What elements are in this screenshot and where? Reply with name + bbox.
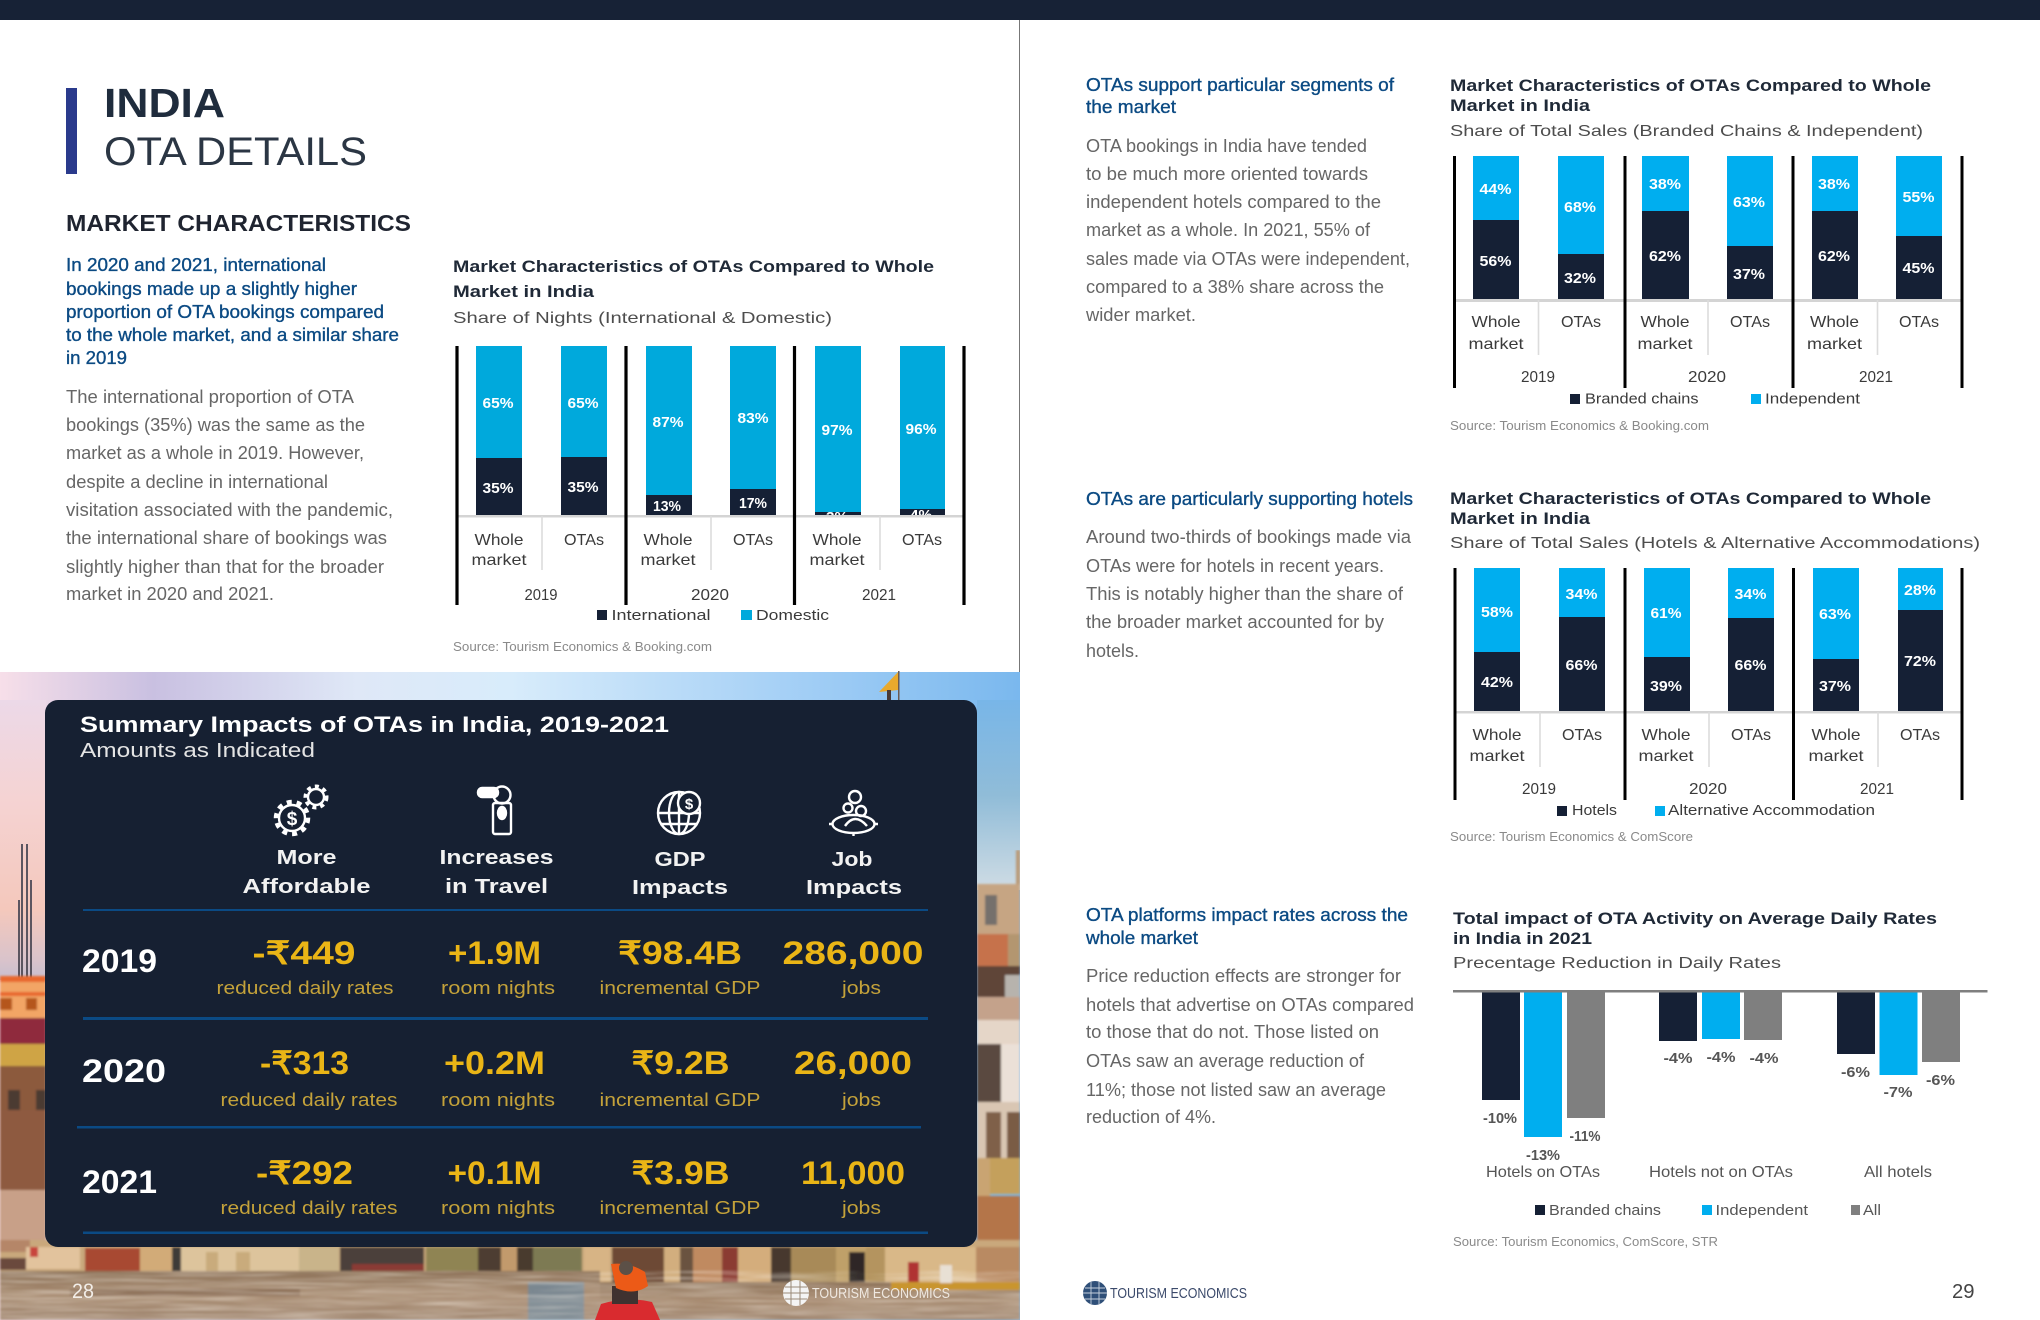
icon: globe with dollar coin — [658, 792, 700, 834]
axis: OTAs — [902, 532, 942, 549]
logo right: Tourism Economics — [1083, 1281, 1247, 1305]
column headers — [242, 847, 902, 899]
legend — [1557, 802, 1875, 819]
stacked bars: 61% — [1650, 606, 1682, 622]
axis: OTAs — [1561, 314, 1601, 331]
text block: hotels: This is notably higher than the share of — [1086, 583, 1404, 604]
category labels: Hotels on OTAs — [1486, 1164, 1600, 1181]
row 2020 — [82, 1045, 912, 1110]
water — [0, 1271, 1020, 1320]
text block: segments: compared to a 38% share across the — [1086, 276, 1384, 297]
text block: rates: OTAs saw an average reduction of — [1086, 1050, 1365, 1071]
row 2019: reduced daily rates — [216, 978, 394, 998]
legend: Hotels — [1572, 802, 1617, 819]
stacked bars — [1474, 568, 1943, 711]
stacked bars: 63% — [1819, 607, 1851, 623]
stacked bars: 34% — [1734, 587, 1767, 603]
row 2019: room nights — [441, 978, 555, 998]
page number 29: 29 — [1952, 1281, 1974, 1303]
text block: market characteristics intro: In 2020 and 2021, international — [66, 255, 326, 275]
chart: branded vs independent — [1450, 76, 1962, 433]
axis: market — [1470, 748, 1525, 765]
row 2020: incremental GDP — [600, 1090, 760, 1110]
row 2021: 11,000 — [801, 1155, 905, 1191]
source: Source: Tourism Economics & ComScore — [1450, 830, 1693, 844]
text block: rates: 11%; those not listed saw an average — [1086, 1079, 1386, 1100]
row 2021: room nights — [441, 1198, 555, 1218]
text block: market characteristics body: the international share of bookings was — [66, 527, 387, 548]
legend — [1570, 390, 1861, 408]
axis: 2020 — [1689, 781, 1727, 798]
stacked bars: 28% — [1904, 583, 1936, 599]
stacked bars: 97% — [822, 423, 853, 439]
chart title — [1450, 489, 1980, 552]
text block: market characteristics body: market in 2020 and 2021. — [66, 583, 274, 604]
text block: rates: OTA platforms impact rates across the — [1086, 905, 1408, 925]
legend: Branded chains — [1549, 1202, 1661, 1219]
axis: 2021 — [862, 587, 896, 604]
axis: OTAs — [1730, 314, 1770, 331]
stacked bars: 37% — [1733, 267, 1765, 283]
row 2019: 286,000 — [782, 935, 924, 971]
axis: 2021 — [1860, 781, 1894, 798]
axis: OTAs — [733, 532, 773, 549]
stacked bars: 35% — [568, 480, 599, 496]
chart title: in India in 2021 — [1453, 929, 1592, 948]
row 2019: ₹98.4B — [618, 935, 742, 971]
chart title: Market Characteristics of OTAs Compared to Whole — [1450, 76, 1931, 95]
axis: Whole — [644, 532, 693, 549]
row 2019: 2019 — [82, 943, 157, 979]
text block: rates: reduction of 4%. — [1086, 1106, 1216, 1127]
column headers: More — [276, 847, 336, 869]
stacked bars — [1473, 156, 1942, 299]
text block: market characteristics intro: to the whole market, and a similar share — [66, 325, 399, 345]
axis: Whole — [1472, 727, 1522, 744]
icon: group of people — [829, 791, 878, 836]
grouped bars — [1453, 990, 1988, 1137]
stacked bars: 42% — [1481, 675, 1513, 691]
legend — [597, 607, 830, 624]
text block: market characteristics body: despite a decline in international — [66, 471, 328, 492]
row 2020: jobs — [841, 1090, 881, 1110]
chart title: Market in India — [1450, 96, 1591, 115]
text block: market characteristics body: bookings (35%) was the same as the — [66, 414, 365, 435]
stacked bars: 38% — [1818, 177, 1850, 193]
chart title — [453, 257, 934, 327]
panel: summary impacts — [45, 700, 977, 1247]
bar value labels: -11% — [1570, 1128, 1600, 1145]
chart title: Market in India — [453, 282, 595, 301]
legend — [1535, 1202, 1881, 1219]
axis: market — [810, 552, 865, 569]
row 2020: +0.2M — [444, 1045, 545, 1081]
row 2021: +0.1M — [448, 1155, 542, 1191]
text block: hotels: hotels. — [1086, 640, 1139, 661]
figure in red robe — [595, 1261, 660, 1320]
axis: 2020 — [1688, 369, 1726, 386]
bar value labels: -4% — [1706, 1049, 1736, 1066]
text block: segments: the market — [1086, 97, 1176, 117]
chart: impact on average daily rates — [1453, 909, 1988, 1249]
text block: market characteristics intro: in 2019 — [66, 348, 127, 368]
stacked bars: 66% — [1566, 658, 1598, 674]
bar value labels: -6% — [1926, 1072, 1955, 1089]
chart title — [1450, 76, 1931, 140]
icon: gears with dollar: $ — [287, 809, 298, 830]
axis: OTAs — [564, 532, 604, 549]
stacked bars: 13% — [653, 499, 681, 515]
row 2020: reduced daily rates — [220, 1090, 398, 1110]
stacked bars: 32% — [1564, 271, 1596, 287]
column headers: Affordable — [242, 876, 370, 898]
column headers: Increases — [440, 847, 554, 869]
stacked bars: 55% — [1902, 190, 1935, 206]
stacked bars: 45% — [1902, 261, 1935, 277]
row 2020: 26,000 — [794, 1045, 912, 1081]
axis: 2019 — [1522, 781, 1556, 798]
axis — [1454, 156, 1962, 388]
axis: market — [1638, 336, 1693, 353]
left page background photo — [0, 671, 1020, 1320]
row 2020: 2020 — [82, 1053, 166, 1089]
row 2021: jobs — [841, 1198, 881, 1218]
flag — [879, 671, 900, 702]
chart title: Share of Total Sales (Hotels & Alternative Accommodations) — [1450, 535, 1980, 552]
stacked bars: 96% — [906, 422, 937, 438]
chart title: Precentage Reduction in Daily Rates — [1453, 955, 1781, 972]
axis: 2019 — [524, 587, 558, 604]
stacked bars: 56% — [1480, 254, 1512, 270]
stacked bars: 65% — [568, 396, 599, 412]
row 2019 — [82, 935, 924, 998]
text block: segments: sales made via OTAs were independent, — [1086, 248, 1410, 269]
top bar — [0, 0, 2040, 20]
legend: Independent — [1716, 1202, 1809, 1219]
text block: market characteristics body — [66, 386, 393, 604]
stacked bars: 68% — [1564, 200, 1596, 216]
icon: finger tapping phone — [478, 786, 511, 834]
panel title — [80, 712, 669, 762]
axis: OTAs — [1900, 727, 1940, 744]
row 2019: jobs — [841, 978, 881, 998]
chart: hotels vs alternative — [1450, 489, 1980, 844]
ghats riverfront — [0, 1240, 1020, 1286]
stacked bars: 38% — [1649, 177, 1681, 193]
row 2019: -₹449 — [252, 935, 356, 971]
legend: Alternative Accommodation — [1668, 802, 1875, 819]
axis: market — [1807, 336, 1863, 353]
row 2019: incremental GDP — [600, 978, 760, 998]
text block: hotels — [1086, 489, 1413, 661]
bar value labels: -7% — [1884, 1084, 1912, 1101]
right buildings — [977, 850, 1020, 1286]
axis: market — [472, 552, 527, 569]
row 2020: ₹9.2B — [632, 1045, 730, 1081]
stacked bars: 72% — [1904, 654, 1936, 670]
stacked bars: 4% — [910, 508, 932, 524]
text block: market characteristics body: slightly higher than that for the broader — [66, 556, 384, 577]
axis: 2021 — [1859, 369, 1893, 386]
text block: rates: to those that do not. Those listed on — [1086, 1021, 1379, 1042]
axis: market — [1638, 748, 1694, 765]
column headers: GDP — [654, 849, 706, 871]
bar value labels — [1483, 1049, 1955, 1164]
text block: hotels: the broader market accounted for by — [1086, 611, 1385, 632]
panel title: Amounts as Indicated — [80, 740, 315, 762]
row 2021: -₹292 — [256, 1155, 353, 1191]
text block: market characteristics body: market as a whole in 2019. However, — [66, 442, 364, 463]
text block: market characteristics intro: bookings made up a slightly higher — [66, 279, 357, 299]
stacked bars: 62% — [1649, 249, 1681, 265]
source: Source: Tourism Economics & Booking.com — [1450, 419, 1709, 433]
title block — [66, 80, 367, 174]
bar value labels: -4% — [1750, 1050, 1778, 1067]
left buildings — [0, 976, 46, 1250]
text block: rates: Price reduction effects are stronger for — [1086, 965, 1401, 986]
chart: share of nights — [453, 257, 964, 654]
axis: OTAs — [1731, 727, 1771, 744]
row 2021: reduced daily rates — [220, 1198, 398, 1218]
page divider — [1019, 20, 1020, 672]
category labels: All hotels — [1864, 1164, 1932, 1181]
section heading: MARKET CHARACTERISTICS — [66, 210, 411, 236]
row 2021: 2021 — [82, 1164, 157, 1200]
stacked bars: 63% — [1733, 195, 1765, 211]
text block: market characteristics intro: proportion of OTA bookings compared — [66, 302, 384, 322]
bar value labels: -13% — [1526, 1147, 1560, 1164]
column headers: Impacts — [632, 877, 728, 899]
bar value labels: -10% — [1483, 1110, 1517, 1127]
chart title: Market Characteristics of OTAs Compared to Whole — [453, 257, 934, 276]
stacked bars: 3% — [826, 510, 848, 526]
axis: 2019 — [1521, 369, 1555, 386]
text block: segments: to be much more oriented towards — [1086, 163, 1368, 184]
row 2020: room nights — [441, 1090, 555, 1110]
title block: INDIA — [104, 80, 225, 126]
text block: segments: OTAs support particular segments of — [1086, 75, 1395, 95]
text block: hotels: Around two-thirds of bookings made via — [1086, 526, 1412, 547]
stacked bars: 17% — [739, 496, 767, 512]
stacked bars: 35% — [482, 481, 514, 497]
source: Source: Tourism Economics & Booking.com — [453, 640, 712, 654]
stacked bars: 44% — [1480, 182, 1512, 198]
axis — [457, 346, 964, 605]
axis: Whole — [1810, 314, 1859, 331]
axis: Whole — [1812, 727, 1861, 744]
column headers: Job — [832, 849, 872, 871]
legend: All — [1863, 1202, 1881, 1219]
logo left: Tourism Economics — [783, 1280, 950, 1306]
page number 28: 28 — [72, 1280, 94, 1303]
row 2021 — [82, 1155, 905, 1218]
axis: Whole — [1642, 727, 1691, 744]
title block: OTA DETAILS — [104, 130, 367, 174]
axis: OTAs — [1562, 727, 1602, 744]
text block: market characteristics body: visitation associated with the pandemic, — [66, 499, 393, 520]
bar value labels: -4% — [1664, 1050, 1692, 1067]
legend: Branded chains — [1585, 390, 1698, 408]
row 2021: ₹3.9B — [632, 1155, 730, 1191]
category labels: Hotels not on OTAs — [1649, 1164, 1793, 1181]
stacked bars: 62% — [1818, 249, 1850, 265]
axis: 2020 — [691, 587, 729, 604]
chart title: Share of Total Sales (Branded Chains & Independent) — [1450, 123, 1923, 140]
stacked bars: 65% — [482, 396, 514, 412]
text block: segments: wider market. — [1085, 304, 1196, 325]
text block: segments: OTA bookings in India have tended — [1086, 135, 1367, 156]
row 2019: +1.9M — [448, 935, 541, 971]
row 2021: incremental GDP — [600, 1198, 760, 1218]
legend: Independent — [1765, 390, 1861, 408]
column headers: Impacts — [806, 877, 902, 899]
stacked bars: 83% — [738, 411, 769, 427]
telecom tower — [19, 844, 31, 978]
axis: Whole — [812, 532, 862, 549]
axis: Whole — [474, 532, 524, 549]
axis: market — [1468, 336, 1524, 353]
legend: Domestic — [756, 607, 830, 624]
text block: segments: independent hotels compared to the — [1086, 191, 1381, 212]
axis — [1455, 568, 1962, 800]
text block: rates: whole market — [1085, 928, 1198, 948]
boat with passengers — [891, 1262, 1020, 1290]
axis: market — [1808, 748, 1864, 765]
source: Source: Tourism Economics, ComScore, STR — [1453, 1235, 1718, 1249]
legend: International — [612, 607, 710, 624]
chart title: Market in India — [1450, 509, 1591, 528]
text block: rates: hotels that advertise on OTAs compared — [1086, 994, 1414, 1015]
text block: rates — [1085, 905, 1414, 1127]
column headers: in Travel — [445, 876, 548, 898]
axis: OTAs — [1899, 314, 1939, 331]
row 2020: -₹313 — [260, 1045, 349, 1081]
chart title: Market Characteristics of OTAs Compared to Whole — [1450, 489, 1931, 508]
stacked bars: 39% — [1650, 679, 1682, 695]
text block: hotels: OTAs were for hotels in recent years. — [1086, 555, 1384, 576]
text block: market characteristics body: The international proportion of OTA — [66, 386, 355, 407]
text block: market characteristics intro — [66, 255, 399, 368]
stacked bars — [476, 346, 945, 526]
axis: Whole — [1472, 314, 1521, 331]
icon: gears with dollar — [276, 786, 326, 834]
stacked bars: 34% — [1566, 587, 1598, 603]
text block: hotels: OTAs are particularly supporting hotels — [1086, 489, 1413, 509]
bar value labels: -6% — [1841, 1064, 1870, 1081]
text block: segments — [1085, 75, 1410, 325]
chart title: Share of Nights (International & Domestic) — [453, 310, 832, 327]
text block: segments: market as a whole. In 2021, 55% of — [1086, 219, 1371, 240]
stacked bars: 58% — [1481, 605, 1513, 621]
logo left: Tourism Economics: TOURISM ECONOMICS — [812, 1286, 950, 1302]
category labels — [1486, 1164, 1932, 1181]
axis: Whole — [1640, 314, 1690, 331]
stacked bars: 87% — [652, 415, 684, 431]
logo right: Tourism Economics: TOURISM ECONOMICS — [1110, 1286, 1247, 1302]
chart title: Total impact of OTA Activity on Average Daily Rates — [1453, 909, 1937, 928]
chart title — [1453, 909, 1937, 972]
panel title: Summary Impacts of OTAs in India, 2019-2021 — [80, 712, 669, 737]
stacked bars: 37% — [1819, 679, 1851, 695]
axis: market — [640, 552, 696, 569]
stacked bars: 66% — [1734, 658, 1767, 674]
icon: globe with dollar coin: $ — [685, 796, 694, 813]
